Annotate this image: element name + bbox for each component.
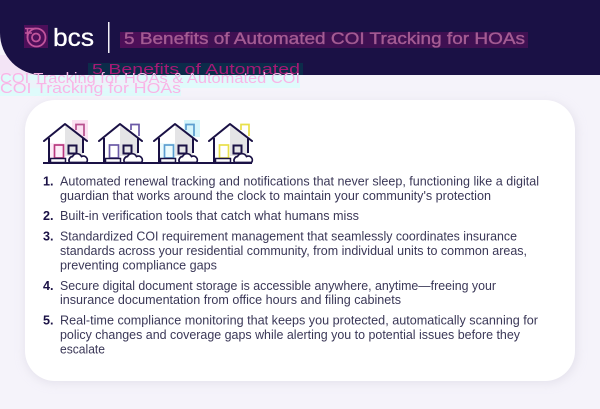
benefit 5 — [43, 314, 538, 356]
benefit 5: escalate — [60, 342, 105, 356]
content card — [25, 100, 575, 381]
glitched duplicate title: 5 Benefits of Automated — [92, 61, 300, 78]
header title: 5 Benefits of Automated COI Tracking for HOAs — [124, 30, 525, 48]
content card shadow — [25, 102, 577, 383]
icon: house pink — [44, 120, 88, 163]
benefit 4: Secure digital document storage is accessible anywhere, anytime—freeing your — [60, 279, 496, 293]
benefit 2: Built-in verification tools that catch what humans miss — [60, 209, 359, 223]
benefit 3: preventing compliance gaps — [60, 258, 217, 272]
benefit 3 — [43, 230, 527, 272]
icon: house blue — [154, 120, 200, 163]
benefit 5: 5. — [43, 314, 54, 328]
benefit 1: Automated renewal tracking and notifications that never sleep, functioning like a digital — [60, 174, 539, 188]
benefit 1: 1. — [43, 174, 54, 188]
benefit 3: standards across your residential community, from individual units to common areas, — [60, 244, 527, 258]
icon: house purple — [99, 124, 142, 163]
icon: row of houses — [43, 120, 252, 164]
benefit 5: Real-time compliance monitoring that keeps you protected, automatically scanning for — [60, 314, 538, 328]
benefit 4: 4. — [43, 279, 54, 293]
glitched duplicate title — [0, 61, 303, 97]
benefit 3: 3. — [43, 230, 54, 244]
header band — [0, 0, 600, 75]
glitched duplicate title: COI Tracking for HOAs & Automated COI — [0, 70, 300, 87]
glitched duplicate title: COI Tracking for HOAs — [0, 80, 181, 97]
benefit 1: guardian that works around the clock to maintain your community's protection — [60, 189, 491, 203]
benefit 2: 2. — [43, 209, 54, 223]
benefit 5: policy changes and coverage gaps while alerting you to potential issues before they — [60, 328, 521, 342]
benefit 4 — [43, 279, 496, 307]
benefit 4: insurance documentation from office hours and filing cabinets — [60, 293, 401, 307]
glitch backdrop — [0, 55, 35, 77]
logo — [24, 24, 94, 52]
icon: house yellow — [209, 124, 252, 163]
benefit 1 — [43, 174, 539, 203]
logo: bcs — [53, 24, 94, 52]
benefit 3: Standardized COI requirement management that seamlessly coordinates insurance — [60, 230, 517, 244]
header divider — [108, 22, 110, 53]
